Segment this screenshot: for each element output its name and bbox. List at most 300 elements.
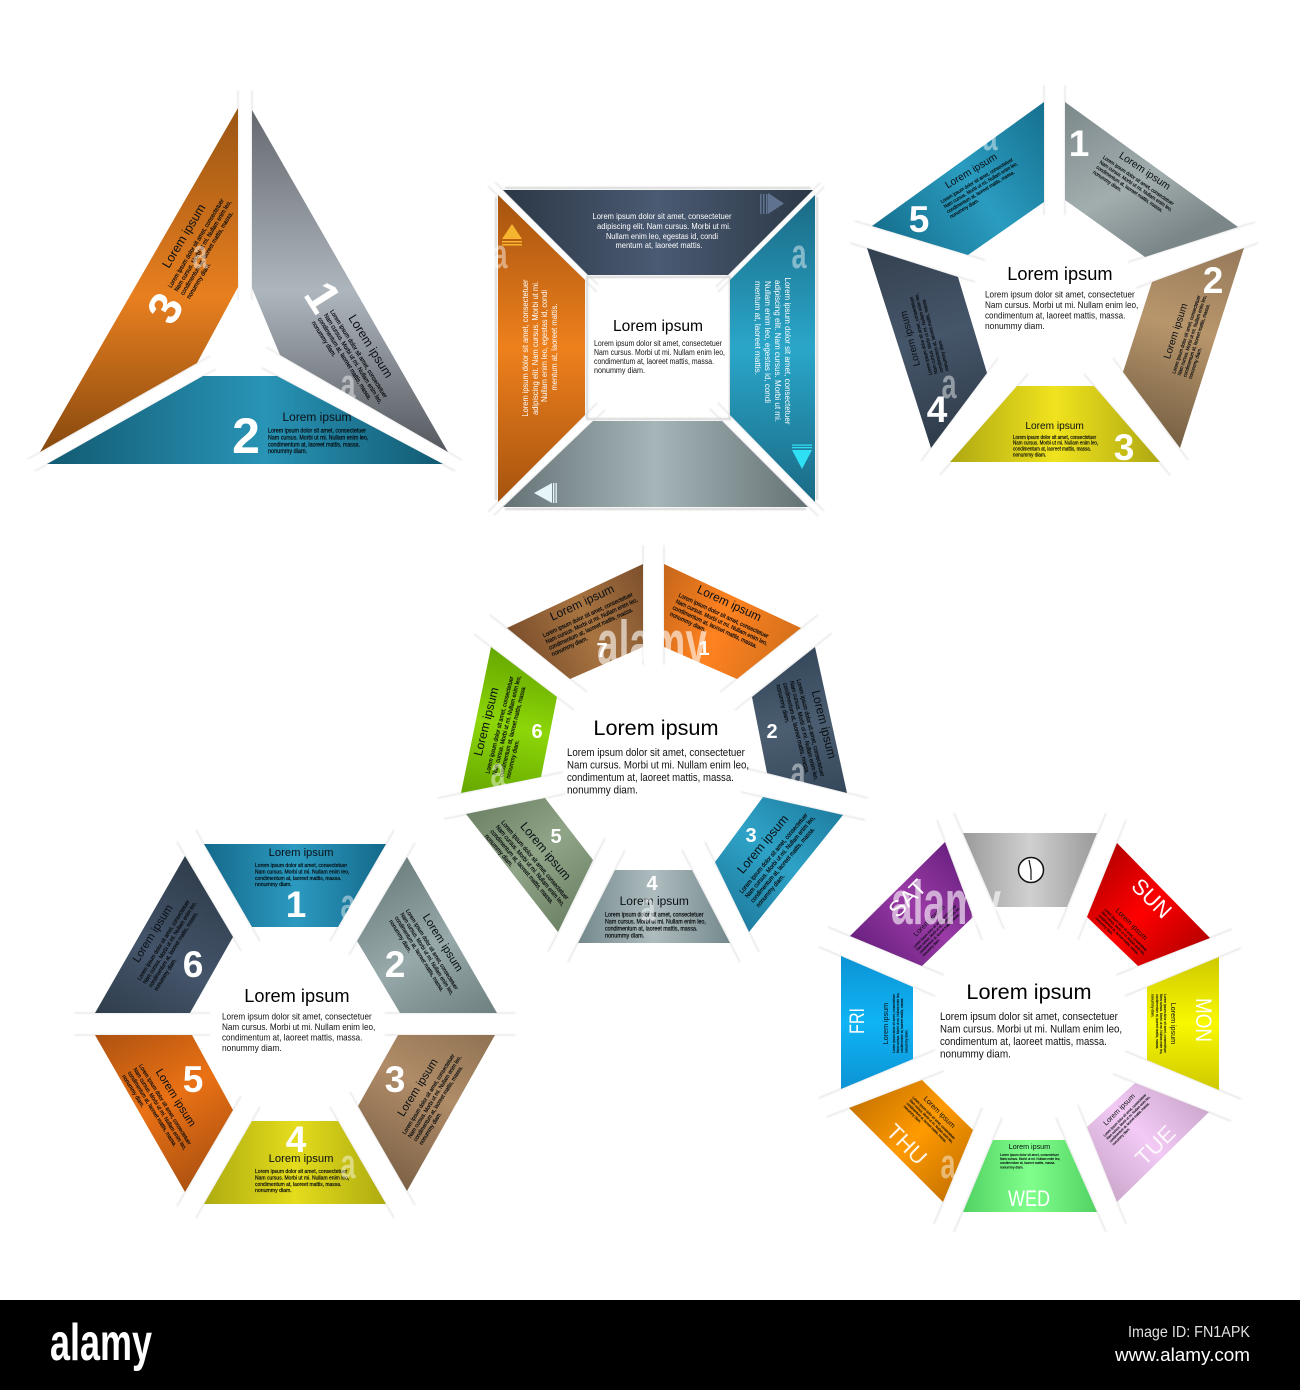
text block: segment 7: Nam cursus. Morbi ut mi. Nullam enim leo, [545,597,639,646]
text block: hexagon centre: Lorem ipsum dolor sit amet, consectetuer [222,1012,372,1022]
text block: segment 2: Lorem ipsum dolor sit amet, consectetuer [795,679,826,777]
text block: Sunday: Lorem ipsum [1114,907,1149,942]
text block: segment 3: condimentum at, laoreet mattis, massa. [413,1065,465,1143]
panel: square left orange [498,195,585,502]
panel: Wednesday green [963,1140,1097,1212]
text block: Thursday: Lorem ipsum [922,1095,957,1130]
label TUE: TUE [1130,1120,1180,1170]
text block: segment 5: condimentum at, laoreet mattis, massa. [126,1071,178,1148]
text block: Thursday [903,1089,964,1150]
watermark marks [192,112,1001,1187]
text block: segment 1: condimentum at, laoreet mattis, massa. [316,316,373,402]
text block: Friday: Nam cursus. Morbi ut mi. Nullam enim leo, [896,993,900,1053]
text block: segment 6: Nam cursus. Morbi ut mi. Nullam enim leo, [142,901,198,985]
text block: segment 4: Lorem ipsum dolor sit amet, consectetuer [909,296,934,376]
text block: heptagon centre: Lorem ipsum dolor sit amet, consectetuer [567,747,745,759]
number 4: 4 [286,1119,307,1160]
number 1: 1 [294,272,352,322]
panel: heptagon segment 4 grey [578,870,730,943]
text block: segment 3: Lorem ipsum dolor sit amet, consectetuer [167,198,226,289]
text block: right: Lorem ipsum dolor sit amet, consectetuer [783,278,793,425]
watermark marks: a [982,112,998,159]
panel: square bottom grey [503,421,808,507]
panel: triangle segment 1 grey [252,110,448,452]
panel: pentagon segment 1 grey [1065,102,1238,257]
text block: segment 3: nonummy diam. [419,1111,444,1146]
text block: hexagon centre: Lorem ipsum [244,985,350,1006]
text block: segment 2: nonummy diam. [268,449,307,455]
text block: segment 2 [268,410,369,455]
text block: Saturday [906,896,967,957]
label MON: MON [1191,998,1216,1042]
watermark marks: a [192,230,208,277]
text block: Saturday: Nam cursus. Morbi ut mi. Nullam enim leo, [916,906,961,952]
number 3: 3 [385,1059,405,1100]
text block: segment 2: Lorem ipsum [283,410,352,424]
panel: Thursday orange [849,1080,973,1202]
icon: down arrow [792,444,812,469]
text block: Sunday: condimentum at, laoreet mattis, massa. [1098,914,1139,955]
text block: octagon centre: Nam cursus. Morbi ut mi. Nullam enim leo, [940,1023,1122,1035]
text block: segment 7: Lorem ipsum dolor sit amet, consectetuer [542,592,634,639]
text block: segment 4 [605,894,706,939]
text block: top: mentum at, laoreet mattis. [616,240,702,250]
text block: segment 3: Nam cursus. Morbi ut mi. Nullam enim leo, [1013,441,1098,447]
text block: hexagon centre: nonummy diam. [222,1043,282,1053]
text block: right: Nullam enim leo, egestas id, condi [763,281,773,403]
text block: segment 4: nonummy diam. [255,1188,292,1194]
text block: segment 1 [1091,143,1184,223]
text block: segment 6: Lorem ipsum dolor sit amet, consectetuer [485,676,515,774]
text block: segment 1 [310,299,405,413]
text block: segment 3: Lorem ipsum [734,812,791,876]
number 2: 2 [1203,260,1223,301]
figure: pentagon diagram [867,102,1244,468]
text block: heptagon centre: nonummy diam. [567,784,638,796]
number 1: 1 [1069,123,1089,164]
text block: segment 6: condimentum at, laoreet mattis, massa. [498,685,528,778]
panel: square top dark [503,190,813,275]
text block: pentagon centre [985,263,1138,331]
watermark marks: a [492,230,508,277]
text block: Wednesday: nonummy diam. [1000,1165,1023,1169]
text block: segment 7 [534,574,645,658]
text block: right: adipiscing elit. Nam cursus. Morbi ut mi. [773,280,783,422]
number 6: 6 [531,721,543,743]
text block: Monday: nonummy diam. [1151,994,1155,1017]
text block: segment 4: nonummy diam. [937,339,951,372]
text block: square centre: Lorem ipsum [613,318,703,335]
text block: segment 1: Lorem ipsum dolor sit amet, consectetuer [677,593,769,640]
text block: segment 6: nonummy diam. [505,739,521,779]
text block: segment 5 [120,1055,207,1159]
label FRI: FRI [846,1008,869,1034]
text block: segment 2: Lorem ipsum [420,912,465,974]
text block: left: mentum at, laoreet mattis. [549,304,559,390]
text block: segment 2: nonummy diam. [1188,347,1204,380]
text block: Saturday: condimentum at, laoreet mattis, massa. [919,913,960,954]
text block: segment 4: Lorem ipsum [269,1153,333,1165]
figure: hexagon diagram [95,844,497,1204]
text block: segment 6: Lorem ipsum [471,686,501,757]
number 6: 6 [183,944,203,985]
text block: segment 1: Lorem ipsum dolor sit amet, consectetuer [255,863,347,869]
text block: segment 6: nonummy diam. [154,957,179,992]
text block: segment 7: nonummy diam. [551,636,589,658]
text block: left: Lorem ipsum dolor sit amet, consectetuer [520,279,530,416]
text block: segment 2: Lorem ipsum dolor sit amet, consectetuer [404,909,459,991]
panel: triangle segment 2 blue [47,376,443,464]
text block: right: mentum at, laoreet mattis. [753,281,763,375]
text block: segment 1: Lorem ipsum dolor sit amet, consectetuer [1101,155,1175,207]
text block: segment 4: Lorem ipsum [899,310,923,367]
watermark marks: a [640,883,656,930]
text block: square centre [594,318,725,375]
text block: segment 1: Nam cursus. Morbi ut mi. Nullam enim leo, [255,869,350,875]
text block: Wednesday: Lorem ipsum dolor sit amet, consectetuer [1000,1153,1060,1157]
text block: segment 1: Nam cursus. Morbi ut mi. Nullam enim leo, [322,313,384,405]
panel: Friday blue [841,956,913,1089]
number 7: 7 [596,640,608,662]
text block: segment 4: Nam cursus. Morbi ut mi. Nullam enim leo, [255,1175,350,1181]
text block: Monday: Lorem ipsum [1169,1003,1177,1044]
text block: segment 5: condimentum at, laoreet mattis, massa. [946,170,1016,215]
text block: Sunday: Lorem ipsum dolor sit amet, consectetuer [1103,908,1148,953]
text block: Tuesday: Nam cursus. Morbi ut mi. Nullam enim leo, [1106,1095,1151,1141]
text block: segment 5: Lorem ipsum dolor sit amet, consectetuer [137,1064,192,1146]
text block: segment 5: Nam cursus. Morbi ut mi. Nullam enim leo, [494,824,566,908]
text block: segment 4: condimentum at, laoreet mattis, massa. [255,1182,342,1188]
text block: Wednesday: condimentum at, laoreet mattis, massa. [1000,1161,1055,1165]
text block: segment 7: condimentum at, laoreet mattis, massa. [548,607,635,652]
text block: Tuesday: condimentum at, laoreet mattis, massa. [1109,1102,1150,1143]
icon: right arrow [760,193,784,214]
watermark marks: a [790,748,806,795]
text block: segment 2 [774,674,843,785]
text block: Friday: Lorem ipsum [882,1003,890,1044]
footer bar [0,1300,1300,1390]
text block: segment 4: Nam cursus. Morbi ut mi. Nullam enim leo, [914,293,940,374]
number 5: 5 [909,199,929,240]
text block: Friday: nonummy diam. [904,1030,908,1053]
text block: segment 4 [895,290,951,379]
icon: clock [1018,858,1044,882]
text block: Thursday: condimentum at, laoreet mattis, massa. [906,1102,947,1143]
text block: segment 3: Lorem ipsum [396,1057,441,1119]
text block: top: adipiscing elit. Nam cursus. Morbi ut mi. [597,221,731,231]
panel: hexagon segment 1 blue [204,844,386,927]
text block: octagon centre: Lorem ipsum dolor sit amet, consectetuer [940,1011,1118,1023]
panel: Monday yellow [1147,957,1219,1090]
panel: heptagon segment 7 brown [507,564,645,679]
number 5: 5 [550,826,562,848]
text block: hexagon centre: condimentum at, laoreet mattis, massa. [222,1033,362,1043]
text block: segment 1 [255,847,350,888]
text block: segment 2: nonummy diam. [387,919,412,954]
text block: segment 3: Lorem ipsum [1025,421,1084,432]
text block: segment 5: Lorem ipsum dolor sit amet, consectetuer [940,157,1015,205]
panel: pentagon segment 3 yellow [950,386,1160,468]
number 5: 5 [183,1059,203,1100]
figure: triangle diagram [40,108,448,464]
watermark marks: a [940,1140,956,1187]
label WED: WED [1008,1186,1050,1211]
text block: segment 6: Lorem ipsum dolor sit amet, consectetuer [137,899,192,982]
text block: square centre: condimentum at, laoreet mattis, massa. [594,357,714,366]
panel: pentagon segment 2 brown [1123,248,1244,448]
text block: segment 1: Lorem ipsum [346,312,396,381]
text block: Monday: Nam cursus. Morbi ut mi. Nullam enim leo, [1159,994,1163,1054]
text block: pentagon centre: nonummy diam. [985,321,1045,331]
text block: segment 3 [388,1043,475,1146]
text block: segment 3: condimentum at, laoreet mattis, massa. [749,826,817,904]
text block: segment 1: Lorem ipsum dolor sit amet, consectetuer [328,309,388,399]
text block: segment 3: nonummy diam. [755,873,787,909]
text block: segment 3: Lorem ipsum [159,202,208,271]
text block: Tuesday: Lorem ipsum dolor sit amet, consectetuer [1103,1093,1148,1138]
icon: left arrow [534,483,557,503]
figure: heptagon diagram [461,564,847,943]
text block: segment 5: Lorem ipsum [943,152,999,191]
panel: hexagon segment 3 brown [358,1035,495,1191]
text block: top [592,211,732,250]
label SUN: SUN [1127,873,1177,923]
text block: segment 5: condimentum at, laoreet mattis, massa. [488,829,555,906]
panel: heptagon segment 6 green [461,647,557,793]
text block: pentagon centre: condimentum at, laoreet mattis, massa. [985,311,1125,321]
text block: Sunday: nonummy diam. [1095,917,1114,936]
watermark marks: a [792,230,807,277]
panel: Tuesday pink [1087,1083,1209,1202]
text block: segment 2: Lorem ipsum dolor sit amet, consectetuer [1171,295,1202,375]
text block: Friday: Lorem ipsum dolor sit amet, consectetuer [892,993,896,1053]
watermark marks: a [340,880,356,927]
text block: Sunday: Nam cursus. Morbi ut mi. Nullam enim leo, [1100,911,1146,956]
text block: segment 5: Nam cursus. Morbi ut mi. Nullam enim leo, [131,1067,187,1152]
text block: segment 3: condimentum at, laoreet mattis, massa. [179,211,235,297]
number 3: 3 [1114,427,1134,468]
text block: segment 1: Nam cursus. Morbi ut mi. Nullam enim leo, [1098,160,1173,213]
number 3: 3 [136,284,194,332]
text block: segment 5: Lorem ipsum [153,1067,198,1129]
text block: Tuesday: nonummy diam. [1112,1127,1131,1146]
text block: segment 2: condimentum at, laoreet mattis, massa. [1182,303,1212,378]
text block: octagon centre: nonummy diam. [940,1048,1011,1060]
text block: left: Nullam enim leo, egestas id, condi [539,290,549,402]
panel: pentagon segment 4 dark [867,248,987,448]
text block: Tuesday: Lorem ipsum [1102,1092,1137,1127]
watermark marks: alamy [597,609,707,678]
text block: left [520,279,559,416]
text block: right [753,278,793,425]
text block: segment 2: condimentum at, laoreet mattis, massa. [393,916,445,993]
panel: octagon clock segment grey [963,833,1097,907]
text block: segment 1: nonummy diam. [310,320,337,359]
watermark marks: a [340,1140,356,1187]
text block: segment 3: nonummy diam. [186,262,213,300]
text block: segment 1: nonummy diam. [1091,170,1123,193]
number 2: 2 [385,944,405,985]
panel: pentagon segment 5 blue [872,102,1044,255]
text block: segment 1 [668,576,779,660]
number 3: 3 [745,825,757,847]
text block: segment 6: Lorem ipsum [131,903,176,965]
text block: segment 4: condimentum at, laoreet mattis, massa. [605,926,698,932]
text block: segment 3 [725,798,828,909]
text block: heptagon centre [567,715,749,796]
text block: segment 5: nonummy diam. [120,1074,145,1109]
text block: Wednesday [1000,1143,1060,1169]
text block: segment 4 [255,1153,350,1194]
panel: Saturday purple [850,842,973,966]
watermark marks: a [490,748,506,795]
text block: segment 2: Nam cursus. Morbi ut mi. Nullam enim leo, [1177,295,1208,376]
watermark marks: a [942,360,957,407]
text block: segment 2: Nam cursus. Morbi ut mi. Nullam enim leo, [268,435,369,441]
text block: segment 3 [1013,421,1098,458]
text block: segment 3 [152,186,246,300]
text block: square centre: Lorem ipsum dolor sit amet, consectetuer [594,339,722,348]
text block: segment 2 [1158,289,1219,380]
text block: hexagon centre [222,985,375,1053]
text block: segment 3: condimentum at, laoreet mattis, massa. [1013,446,1091,452]
text block: Thursday: Lorem ipsum dolor sit amet, consectetuer [911,1096,956,1141]
text block: segment 2: Lorem ipsum [809,689,839,760]
panel: Sunday red [1087,843,1210,966]
text block: Wednesday: Nam cursus. Morbi ut mi. Nullam enim leo, [1000,1157,1060,1161]
panel: triangle segment 3 orange [40,108,246,452]
text block: heptagon centre: Lorem ipsum [593,715,719,740]
text block: segment 2 [387,900,474,1004]
text block: segment 3: Nam cursus. Morbi ut mi. Nullam enim leo, [173,199,233,293]
text block: segment 3: nonummy diam. [1013,452,1046,458]
panel: heptagon segment 1 orange [664,564,801,679]
text block: Thursday: nonummy diam. [903,1105,922,1124]
text block: segment 2: Nam cursus. Morbi ut mi. Nullam enim leo, [788,680,819,781]
text block: segment 5 [483,808,585,917]
text block: segment 5 [933,144,1025,220]
text block: segment 2: Lorem ipsum [1162,302,1190,360]
text block: segment 4: Nam cursus. Morbi ut mi. Nullam enim leo, [605,919,706,925]
panel: square right blue [730,195,815,502]
text block: Monday: condimentum at, laoreet mattis, massa. [1155,994,1159,1049]
number 1: 1 [286,884,306,925]
text block: segment 4: condimentum at, laoreet mattis, massa. [921,298,945,373]
text block: segment 4: Lorem ipsum dolor sit amet, consectetuer [605,913,704,919]
panel: hexagon segment 5 orange [95,1035,233,1192]
figure: square diagram [498,190,815,507]
text block: Wednesday: Lorem ipsum [1009,1143,1050,1151]
text block: segment 6: condimentum at, laoreet mattis, massa. [148,911,200,989]
number 4: 4 [927,389,948,430]
text block: segment 5: nonummy diam. [949,198,981,220]
text block: Friday [882,993,908,1053]
icon: up arrow [502,224,522,246]
text block: segment 1: condimentum at, laoreet mattis, massa. [255,876,342,882]
panel: hexagon segment 6 dark [95,856,233,1013]
text block: segment 4: Lorem ipsum [620,894,689,908]
text block: Thursday: Nam cursus. Morbi ut mi. Nullam enim leo, [908,1099,954,1144]
text block: segment 6 [467,669,537,779]
text block: left: adipiscing elit. Nam cursus. Morbi ut mi. [530,281,540,415]
text block: segment 5: nonummy diam. [483,833,514,869]
number 2: 2 [232,408,260,464]
text block: segment 3: Nam cursus. Morbi ut mi. Nullam enim leo, [744,815,817,900]
text block: segment 5: Lorem ipsum dolor sit amet, consectetuer [499,819,570,901]
text block: segment 4: Lorem ipsum dolor sit amet, consectetuer [255,1169,347,1175]
text block: segment 1: condimentum at, laoreet mattis, massa. [671,605,758,650]
text block: segment 5: Nam cursus. Morbi ut mi. Nullam enim leo, [943,161,1019,210]
text block: Friday: condimentum at, laoreet mattis, massa. [900,998,904,1053]
number 2: 2 [766,721,778,743]
text block: Tuesday [1096,1085,1157,1146]
text block: segment 6: Nam cursus. Morbi ut mi. Nullam enim leo, [491,675,523,776]
text block: segment 1: Lorem ipsum [695,582,764,624]
text block: Sunday [1095,901,1156,962]
text block: segment 4: nonummy diam. [605,933,645,939]
label SAT: SAT [883,874,931,922]
text block: segment 2: Nam cursus. Morbi ut mi. Nullam enim leo, [398,912,454,997]
text block: top: Lorem ipsum dolor sit amet, consectetuer [592,211,732,221]
text block: Monday: Lorem ipsum dolor sit amet, consectetuer [1163,994,1167,1054]
text block: pentagon centre: Lorem ipsum dolor sit amet, consectetuer [985,290,1135,300]
watermark marks: a [340,360,356,407]
panel: heptagon segment 3 blue [715,797,843,932]
text block: octagon centre [940,979,1122,1060]
text block: top: Nullam enim leo, egestas id, condi [606,231,718,241]
label THU: THU [881,1119,932,1170]
footer logo: alamy [50,1314,152,1372]
text block: segment 1: Lorem ipsum [1117,150,1172,193]
text block: square centre: Nam cursus. Morbi ut mi. Nullam enim leo, [594,348,725,357]
text block: segment 6 [123,889,210,992]
panel: heptagon segment 5 sage [466,798,593,932]
text block: segment 3: Lorem ipsum dolor sit amet, consectetuer [738,812,810,895]
text block: segment 1: nonummy diam. [255,882,292,888]
text block: segment 3: Lorem ipsum dolor sit amet, consectetuer [402,1053,457,1136]
figure: octagon weekly diagram [841,833,1219,1212]
text block: segment 1: condimentum at, laoreet mattis, massa. [1095,165,1164,214]
text block: Saturday: Lorem ipsum [912,903,947,938]
text block: square centre: nonummy diam. [594,366,645,375]
text block: octagon centre: condimentum at, laoreet mattis, massa. [940,1036,1107,1048]
text block: pentagon centre: Lorem ipsum [1007,263,1113,284]
text block: segment 5: Lorem ipsum [517,819,574,883]
text block: segment 3: Lorem ipsum dolor sit amet, consectetuer [1013,435,1096,441]
text block: Saturday: Lorem ipsum dolor sit amet, consectetuer [913,904,958,949]
text block: pentagon centre: Nam cursus. Morbi ut mi. Nullam enim leo, [985,300,1138,310]
number 4: 4 [646,873,658,895]
text block: heptagon centre: Nam cursus. Morbi ut mi. Nullam enim leo, [567,759,749,771]
image id: Image ID: FN1APK [1128,1324,1250,1341]
text block: segment 2: nonummy diam. [774,684,791,724]
text block: segment 2: condimentum at, laoreet mattis, massa. [781,682,811,775]
panel: hexagon segment 2 grey [357,857,497,1013]
panel: heptagon segment 2 dark [752,647,847,793]
text block: segment 3: Nam cursus. Morbi ut mi. Nullam enim leo, [407,1055,463,1139]
text block: Monday [1151,994,1177,1054]
text block: segment 7: Lorem ipsum [548,582,616,624]
text block: segment 1: Nam cursus. Morbi ut mi. Nullam enim leo, [674,599,769,647]
text block: hexagon centre: Nam cursus. Morbi ut mi. Nullam enim leo, [222,1022,375,1032]
text block: octagon centre: Lorem ipsum [966,979,1092,1004]
website: www.alamy.com [1114,1345,1250,1365]
text block: segment 1: Lorem ipsum [269,847,333,859]
text block: segment 2: Lorem ipsum dolor sit amet, consectetuer [268,428,366,434]
text block: segment 1: nonummy diam. [668,612,707,634]
text block: segment 2: condimentum at, laoreet mattis, massa. [268,442,360,448]
text block: heptagon centre: condimentum at, laoreet mattis, massa. [567,772,734,784]
